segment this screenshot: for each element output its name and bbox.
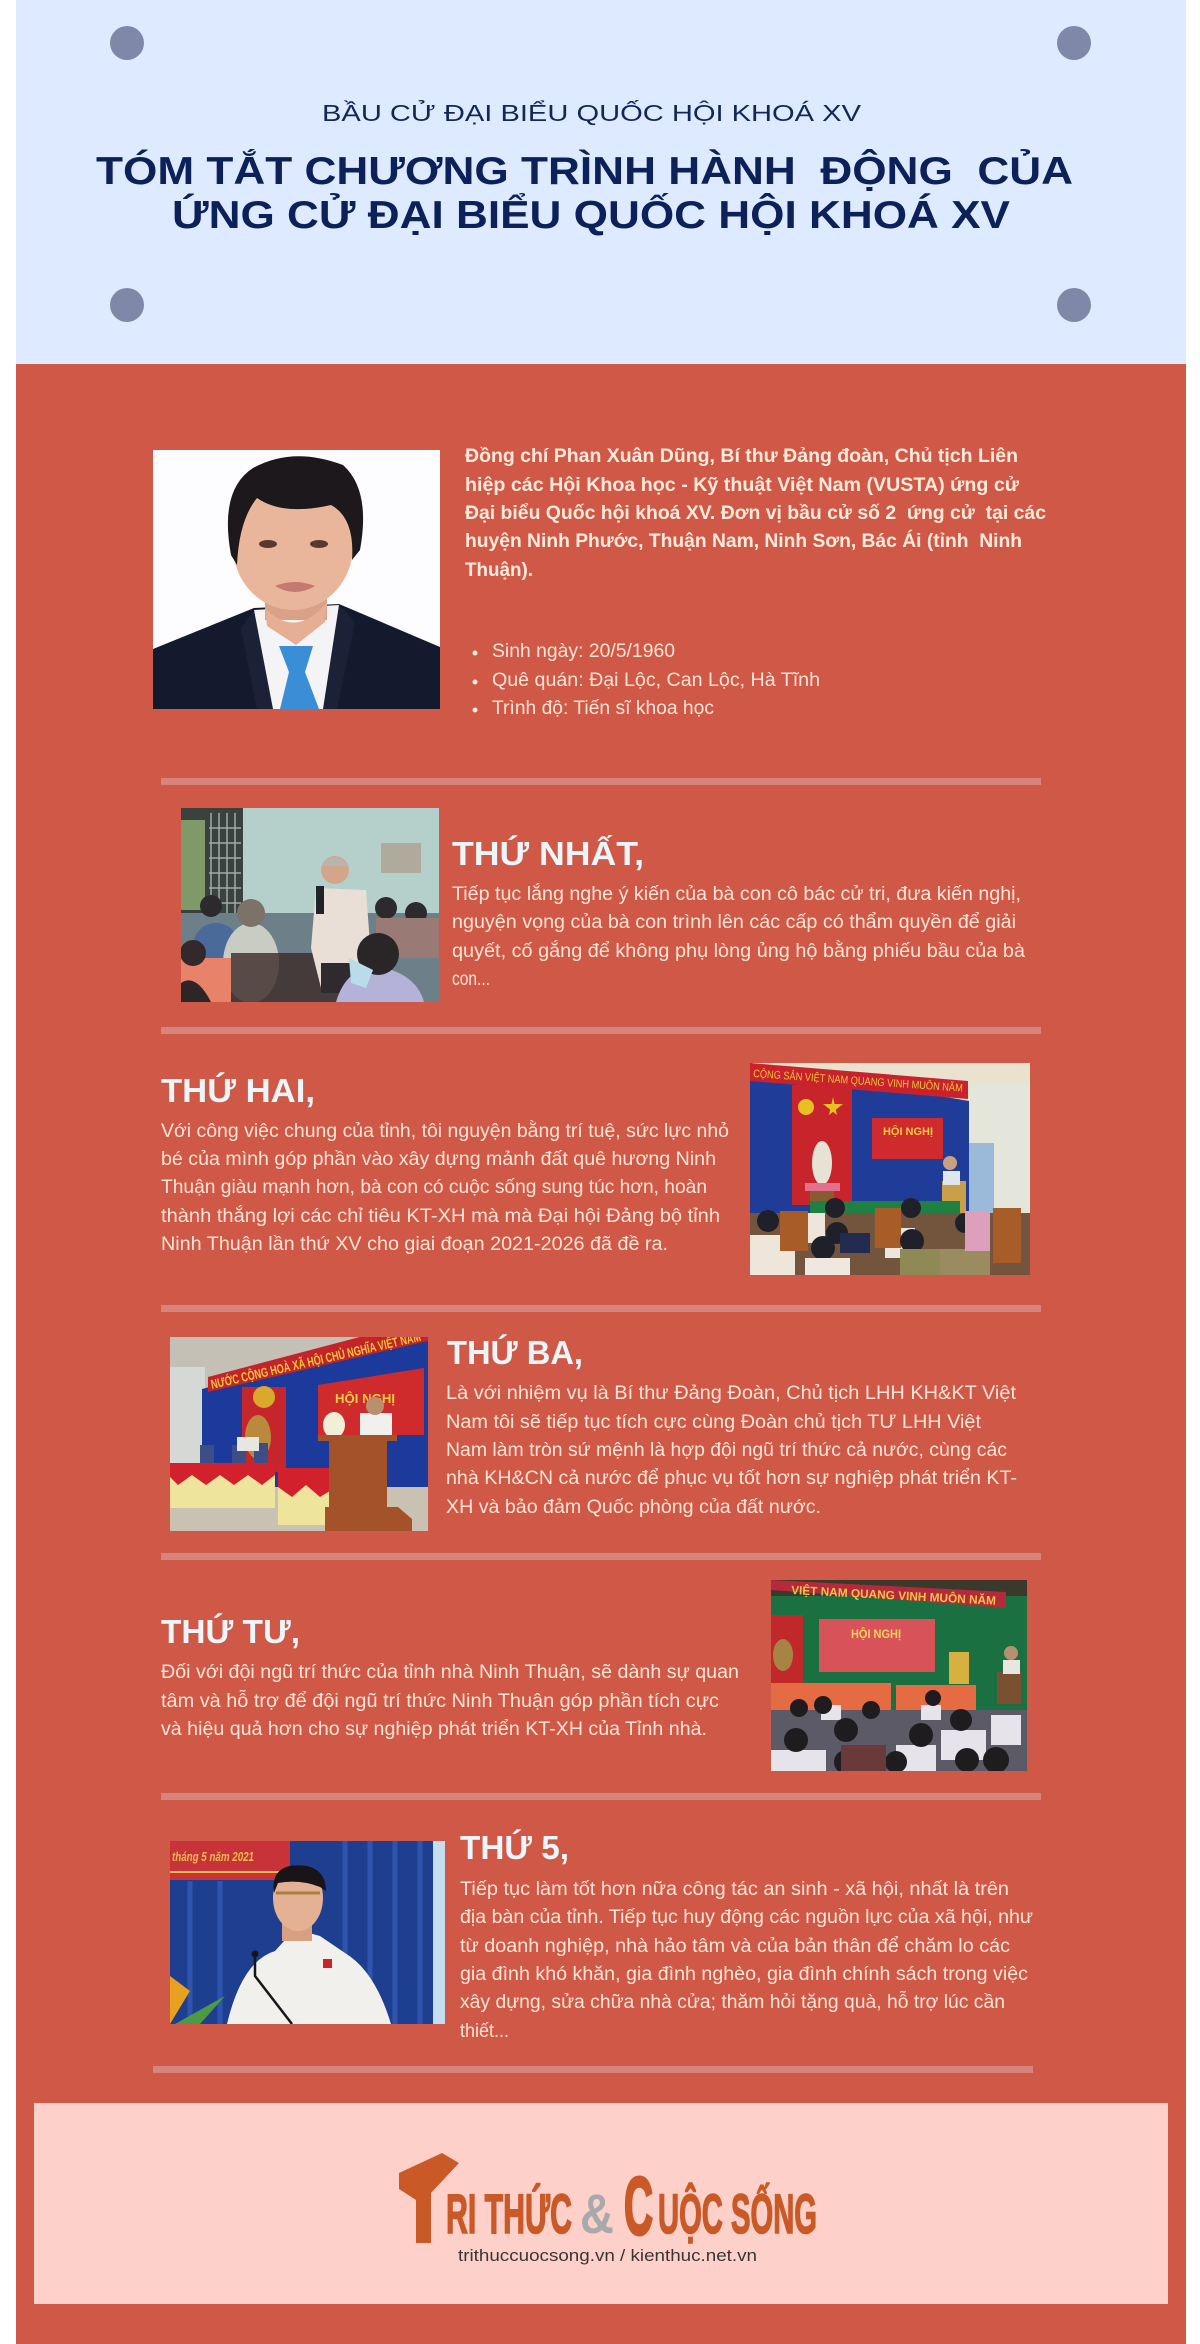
- section: fifth: gia đình khó khăn, gia đình nghèo, gia đình chính sách trong việc: [460, 1964, 1028, 1985]
- section: second: thành thắng lợi các chỉ tiêu KT-XH mà mà Đại hội Đảng bộ tỉnh: [161, 1205, 720, 1227]
- section: second: bé của mình góp phần vào xây dựng mảnh đất quê hương Ninh: [161, 1149, 716, 1170]
- intro text: hiệp các Hội Khoa học - Kỹ thuật Việt Nam (VUSTA) ứng cử: [465, 475, 1019, 496]
- subtitle: BẦU CỬ ĐẠI BIỂU QUỐC HỘI KHOÁ XV: [322, 98, 862, 126]
- section: first: quyết, cố gắng để không phụ lòng ủng hộ bằng phiếu bầu của bà: [452, 940, 1025, 962]
- logo wordmark: [446, 2161, 817, 2252]
- photo: conference hall 1: HỘI NGHỊ: [883, 1125, 933, 1138]
- photo: conference hall 2: [170, 1329, 428, 1531]
- intro text: Thuận).: [465, 560, 533, 581]
- intro text: Đại biểu Quốc hội khoá XV. Đơn vị bầu cử số 2 ứng cử tại các: [465, 503, 1046, 524]
- section: first: Tiếp tục lắng nghe ý kiến của bà con cô bác cử tri, đưa kiến nghị,: [452, 883, 1021, 905]
- section: fifth: THỨ 5,: [460, 1829, 569, 1866]
- logo mark: [399, 2153, 459, 2243]
- section: second: Với công việc chung của tỉnh, tôi nguyện bằng trí tuệ, sức lực nhỏ: [161, 1120, 729, 1142]
- intro text: [465, 446, 1046, 581]
- intro text: Đồng chí Phan Xuân Dũng, Bí thư Đảng đoàn, Chủ tịch Liên: [465, 446, 1018, 467]
- title: TÓM TẮT CHƯƠNG TRÌNH HÀNH ĐỘNG CỦA: [96, 148, 1073, 193]
- photo: conference hall 3: [771, 1580, 1027, 1771]
- title: ỨNG CỬ ĐẠI BIỂU QUỐC HỘI KHOÁ XV: [172, 192, 1010, 237]
- decorative dots: [110, 26, 1091, 322]
- logo wordmark: UỘC SỐNG: [658, 2182, 817, 2245]
- section: fifth: xây dựng, sửa chữa nhà cửa; thăm hỏi tặng quà, hỗ trợ lúc cần: [460, 1991, 1005, 2013]
- section: fourth: và hiệu quả hơn cho sự nghiệp phát triển KT-XH của Tỉnh nhà.: [161, 1719, 707, 1740]
- section: fifth: địa bàn của tỉnh. Tiếp tục huy động các nguồn lực của xã hội, như: [460, 1907, 1033, 1928]
- section: third: Nam làm tròn sứ mệnh là hợp đội ngũ trí thức cả nước, cùng các: [446, 1440, 1007, 1461]
- photo: speaker: tháng 5 năm 2021: [172, 1849, 254, 1864]
- photo: conference hall 3: HỘI NGHỊ: [851, 1626, 901, 1641]
- bio bullet list: [472, 641, 820, 719]
- section: first: nguyện vọng của bà con trình lên các cấp có thẩm quyền để giải: [452, 912, 1016, 933]
- section: fourth: [161, 1613, 739, 1740]
- section: first: con...: [452, 969, 490, 990]
- website url: trithuccuocsong.vn / kienthuc.net.vn: [458, 2246, 757, 2265]
- photo: conference hall 2: HỘI NGHỊ: [335, 1391, 395, 1406]
- logo wordmark: &: [580, 2182, 614, 2245]
- section: third: Nam tôi sẽ tiếp tục tích cực cùng Đoàn chủ tịch TƯ LHH Việt: [446, 1412, 982, 1433]
- photo: voter speaking: [181, 808, 439, 1002]
- section: second: [161, 1072, 729, 1255]
- section: fourth: THỨ TƯ,: [161, 1613, 300, 1650]
- section: third: [446, 1334, 1017, 1518]
- photo: speaker: [170, 1841, 445, 2024]
- title: [96, 148, 1073, 237]
- logo wordmark: RI THỨC: [446, 2182, 572, 2245]
- section: fifth: Tiếp tục làm tốt hơn nữa công tác an sinh - xã hội, nhất là trên: [460, 1879, 1009, 1900]
- section: fourth: tâm và hỗ trợ để đội ngũ trí thức Ninh Thuận góp phần tích cực: [161, 1690, 719, 1712]
- photo: conference hall 3: VIỆT NAM QUANG VINH MUÔN NĂM: [791, 1582, 996, 1608]
- section: fifth: thiết...: [460, 2021, 509, 2042]
- bio bullet list: Quê quán: Đại Lộc, Can Lộc, Hà Tĩnh: [492, 670, 820, 691]
- section: third: nhà KH&CN cả nước để phục vụ tốt hơn sự nghiệp phát triển KT-: [446, 1468, 1017, 1489]
- photo: portrait: [153, 450, 440, 709]
- section: second: THỨ HAI,: [161, 1072, 315, 1109]
- section: second: Ninh Thuận lần thứ XV cho giai đoạn 2021-2026 đã đề ra.: [161, 1234, 668, 1255]
- section: fifth: từ doanh nghiệp, nhà hảo tâm và của bản thân để chăm lo các: [460, 1936, 1010, 1957]
- photo: conference hall 1: [750, 1063, 1030, 1275]
- section: third: Là với nhiệm vụ là Bí thư Đảng Đoàn, Chủ tịch LHH KH&KT Việt: [446, 1383, 1017, 1404]
- section: third: XH và bảo đảm Quốc phòng của đất nước.: [446, 1497, 821, 1518]
- section: fifth: [460, 1829, 1033, 2042]
- logo wordmark: C: [624, 2161, 653, 2252]
- photo: conference hall 1: CỘNG SẢN VIỆT NAM QUANG VINH MUÔN NĂM: [753, 1067, 963, 1095]
- panel: header: [16, 0, 1186, 364]
- section: third: THỨ BA,: [447, 1334, 583, 1371]
- section: first: [452, 835, 1025, 990]
- bio bullet list: Trình độ: Tiến sĩ khoa học: [492, 698, 714, 719]
- intro text: huyện Ninh Phước, Thuận Nam, Ninh Sơn, Bác Ái (tỉnh Ninh: [465, 530, 1022, 552]
- bio bullet list: Sinh ngày: 20/5/1960: [492, 641, 675, 662]
- section: fourth: Đối với đội ngũ trí thức của tỉnh nhà Ninh Thuận, sẽ dành sự quan: [161, 1662, 739, 1683]
- panel: footer logo: [34, 2103, 1168, 2304]
- section: first: THỨ NHẤT,: [452, 835, 644, 872]
- section: second: Thuận giàu mạnh hơn, bà con có cuộc sống sung túc hơn, hoàn: [161, 1177, 707, 1198]
